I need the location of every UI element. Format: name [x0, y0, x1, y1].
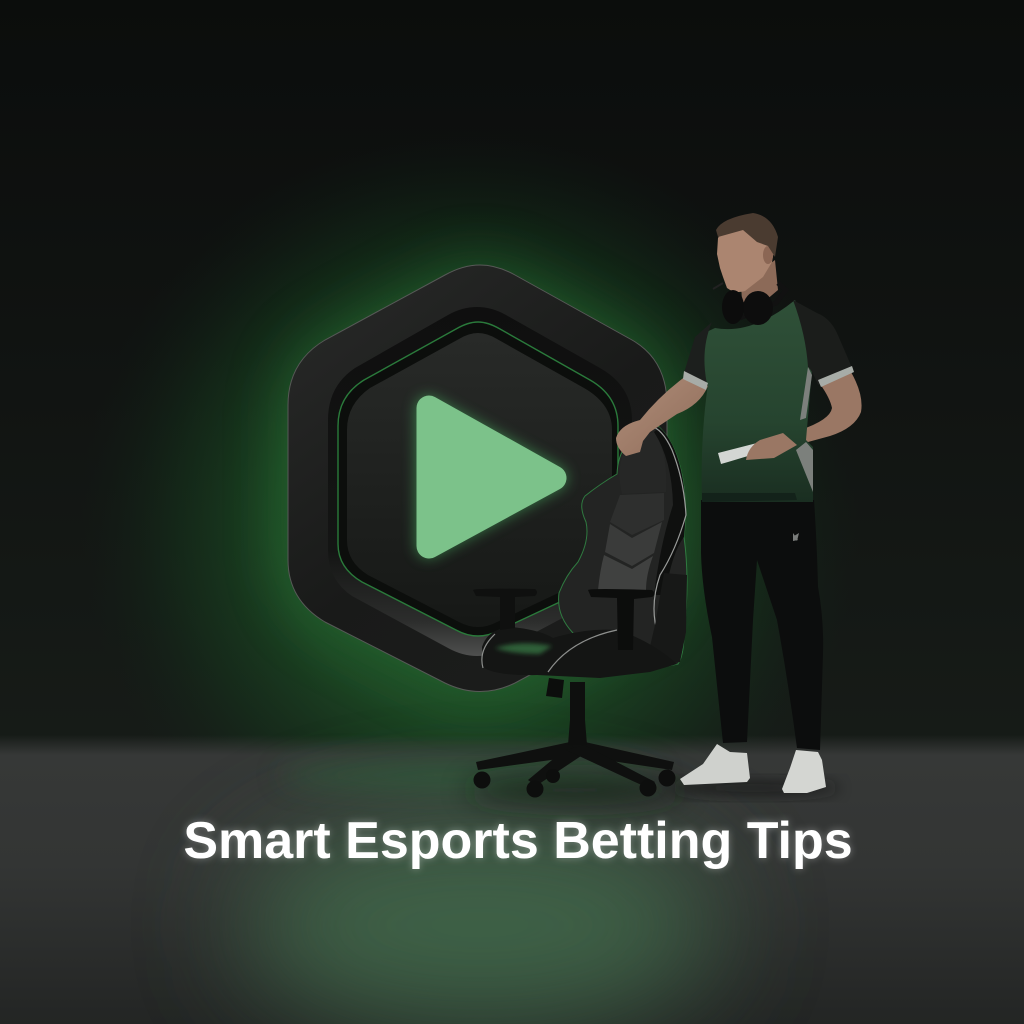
hexagon green rim: [338, 322, 618, 636]
hexagon recessed bevel: [328, 307, 632, 656]
chair chevron panels: [598, 493, 664, 590]
right sleeve: [793, 300, 853, 385]
pants: [701, 500, 823, 750]
ear: [763, 246, 773, 264]
neck: [741, 260, 778, 312]
chair base legs: [476, 742, 674, 788]
head: [717, 224, 776, 292]
hexagon inner panel: [347, 333, 612, 627]
gaming chair: [473, 425, 687, 798]
background wall: [0, 0, 1024, 780]
right arm: [742, 372, 862, 462]
chair seat: [482, 627, 677, 678]
floor: [0, 735, 1024, 1024]
chair side frame with piping: [654, 427, 685, 595]
chair back: [559, 425, 687, 672]
left sleeve: [684, 322, 712, 384]
hexagon back glow: [288, 265, 667, 692]
sleeve cuffs: [683, 366, 854, 390]
title: Smart Esports Betting Tips: [183, 812, 853, 870]
hand on controller: [746, 433, 797, 460]
hair: [716, 213, 778, 257]
right armrest: [588, 589, 654, 650]
chair white piping: [650, 426, 686, 640]
left shoe: [680, 744, 750, 785]
casters: [474, 769, 676, 798]
seat green highlight: [495, 643, 552, 654]
play triangle glow: [428, 408, 555, 546]
hexagon outer face: [288, 265, 667, 692]
shirt side stripe: [796, 367, 813, 492]
standing man: [616, 213, 862, 793]
seat lever: [546, 678, 564, 698]
pants logo: [793, 533, 799, 541]
title: Smart Esports Betting Tips: [183, 812, 853, 870]
gas piston: [568, 682, 587, 745]
seat piping: [482, 630, 617, 672]
wall green glow: [0, 100, 1024, 780]
game controller: [718, 443, 761, 464]
left arm: [616, 376, 708, 456]
headphones: [722, 283, 786, 325]
shirt hem: [702, 493, 797, 502]
chair headrest panel: [619, 432, 666, 494]
hexagon badge with play icon: [288, 265, 667, 692]
right shoe: [782, 750, 826, 793]
shirt body: [690, 300, 813, 502]
headset microphone: [713, 283, 723, 289]
play triangle: [429, 408, 554, 546]
chair side bolster: [645, 573, 687, 668]
left armrest: [473, 589, 537, 630]
